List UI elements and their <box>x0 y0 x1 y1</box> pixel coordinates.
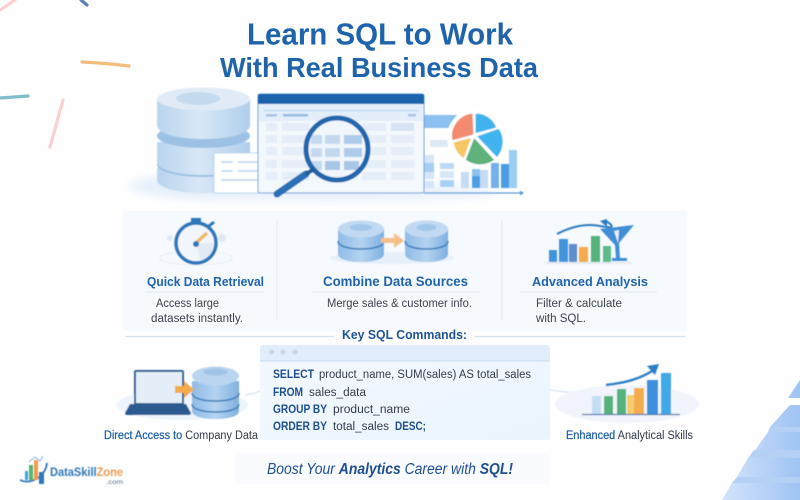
description <box>535 298 622 325</box>
panel: benefits <box>123 211 687 331</box>
icon: two databases with arrow <box>330 220 454 264</box>
code text <box>273 369 531 433</box>
card: advanced analysis <box>520 219 657 325</box>
card: quick data retrieval <box>145 218 264 325</box>
hero illustration <box>129 88 524 201</box>
data table window <box>258 94 424 193</box>
description: Filter & calculate <box>536 298 622 310</box>
code text: DESC; <box>395 421 426 433</box>
title: Learn SQL to Work <box>247 18 513 52</box>
connector swooshes <box>245 390 585 395</box>
background report panel with pie and bars <box>424 115 462 188</box>
panel: sql code window <box>260 345 550 440</box>
heading: Quick Data Retrieval <box>147 274 264 289</box>
icon: bars, arrow and funnel <box>545 219 634 263</box>
description: Access large <box>156 298 219 310</box>
tagline banner <box>235 453 550 484</box>
enhanced skills block <box>555 364 699 442</box>
decorative confetti strokes <box>0 0 129 147</box>
tagline banner: Boost Your Analytics Career with SQL! <box>267 461 513 478</box>
chart: growth bars <box>555 364 699 423</box>
chart: small bars <box>424 150 524 196</box>
direct access block <box>104 366 259 442</box>
caption: Direct Access to Company Data <box>104 430 259 442</box>
description: datasets instantly. <box>151 313 243 325</box>
code text: sales_data <box>309 387 367 399</box>
icon: database stack <box>157 88 250 193</box>
code text: FROM <box>273 387 303 399</box>
code text: product_name, SUM(sales) AS total_sales <box>319 369 531 381</box>
icon: stopwatch <box>160 218 232 265</box>
heading: Advanced Analysis <box>532 274 648 289</box>
logo: data skill zone: DataSkillZone <box>50 467 123 479</box>
logo: data skill zone: .com <box>106 479 123 486</box>
caption: Enhanced Analytical Skills <box>566 430 693 442</box>
document card <box>214 153 260 193</box>
card: combine data sources <box>312 220 480 310</box>
description: with SQL. <box>535 313 586 325</box>
icon: laptop to database <box>116 366 248 420</box>
code text: total_sales <box>333 421 389 433</box>
heading: Combine Data Sources <box>323 274 468 289</box>
chart: pie <box>447 109 503 165</box>
section heading: key sql commands: Key SQL Commands: <box>342 327 467 342</box>
code text: ORDER BY <box>273 421 327 433</box>
icon: magnifying glass <box>277 118 368 194</box>
code text: SELECT <box>273 369 314 381</box>
title: With Real Business Data <box>220 52 538 83</box>
code text: product_name <box>333 404 410 416</box>
description <box>151 298 243 325</box>
description: Merge sales & customer info. <box>327 298 472 310</box>
logo: data skill zone <box>20 456 123 486</box>
decorative staircase corner <box>722 380 800 500</box>
title <box>220 18 538 83</box>
code text: GROUP BY <box>273 404 327 416</box>
